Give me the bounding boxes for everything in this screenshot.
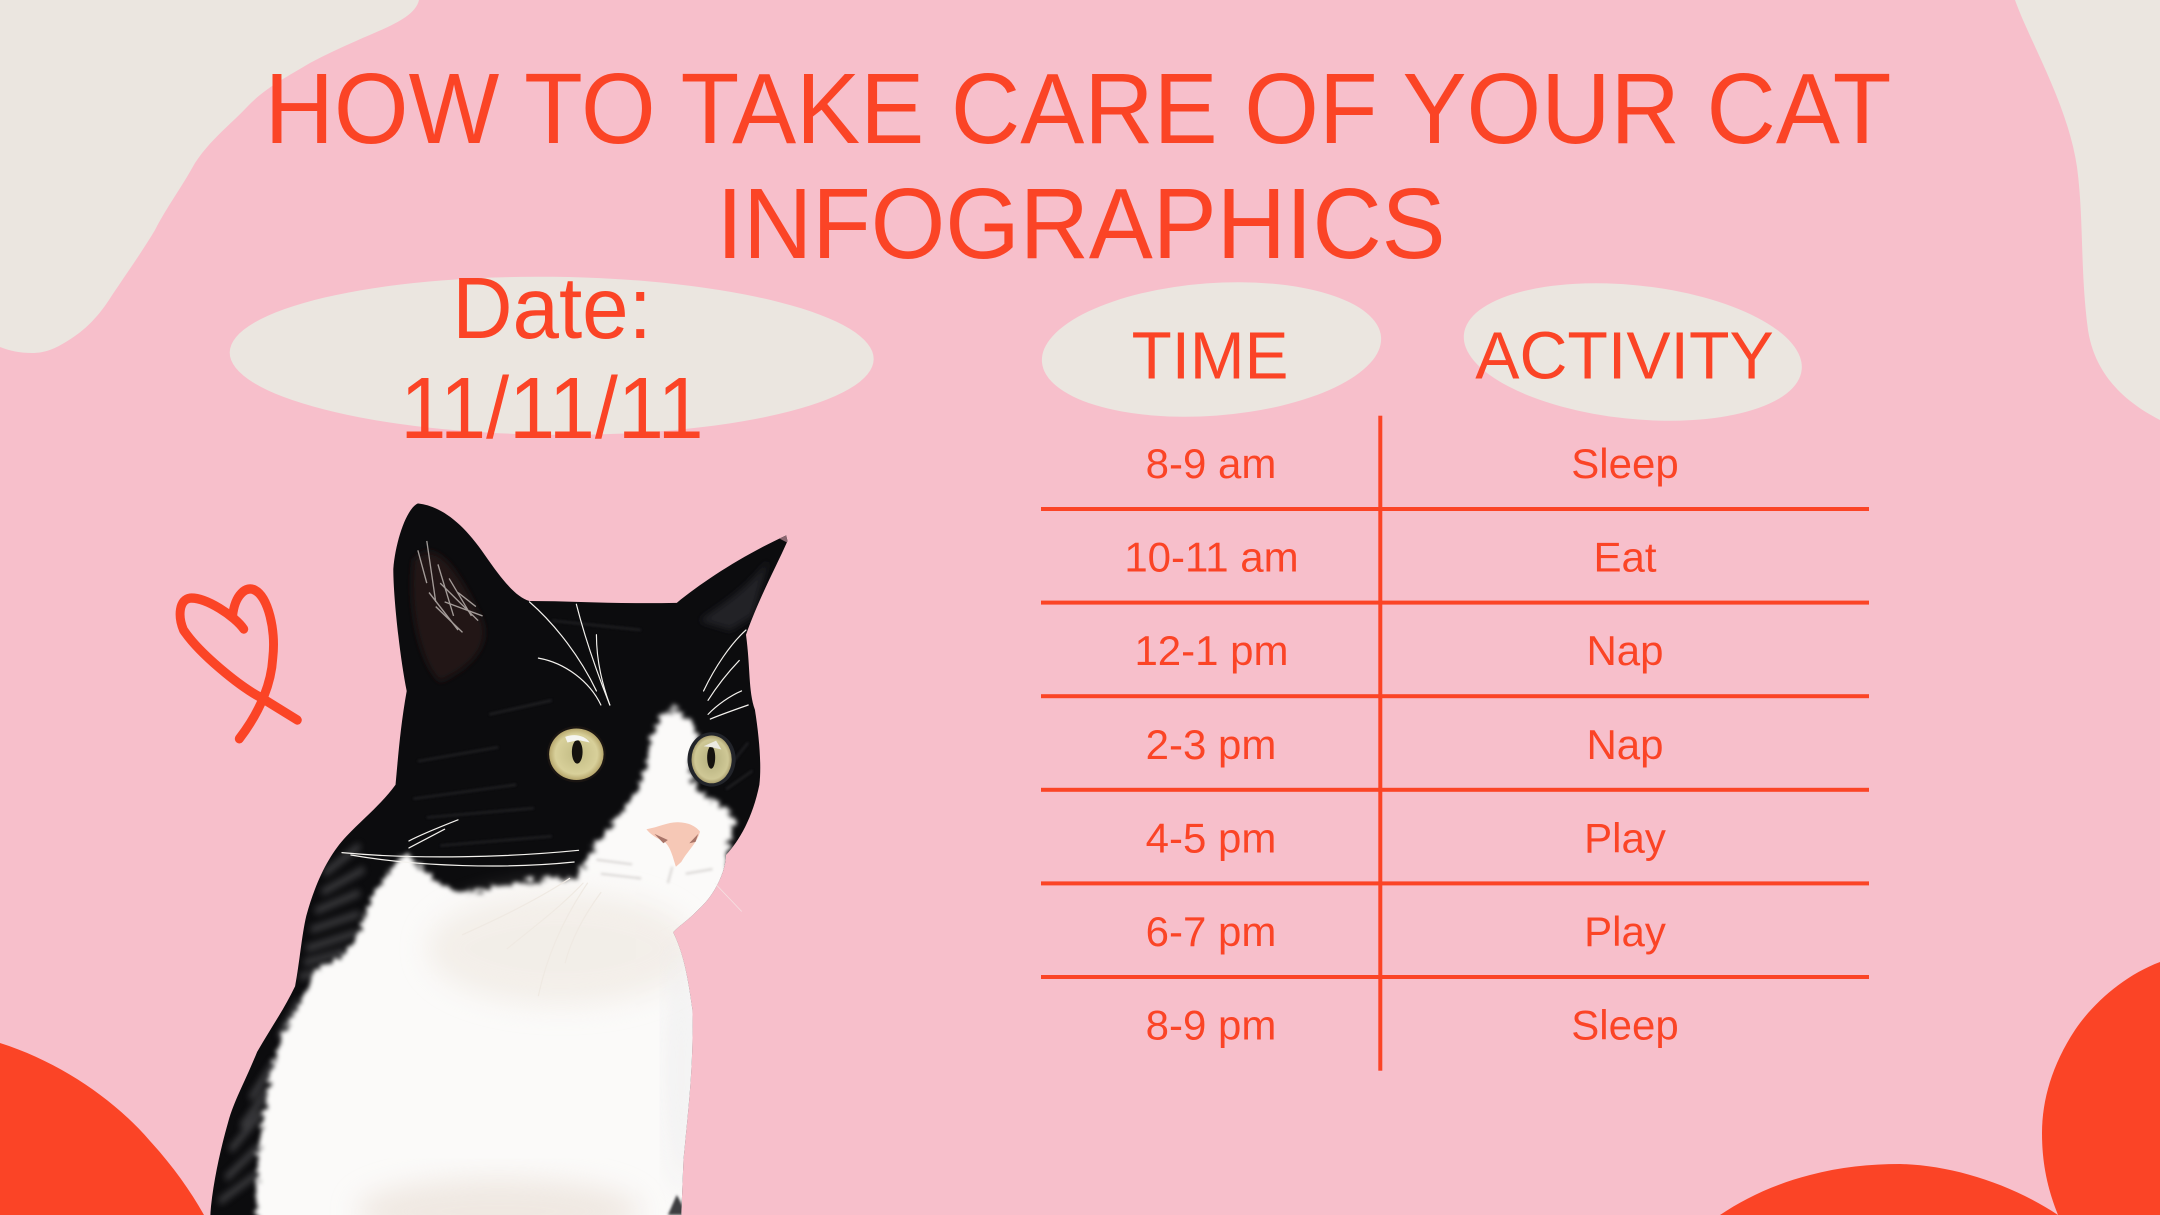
blob: top-left beige <box>0 0 419 353</box>
cat bottom-right dark patch <box>666 1194 682 1215</box>
row 1 <box>1146 440 1679 487</box>
time header ellipse <box>1037 271 1386 428</box>
row 2: 10-11 am <box>1124 534 1299 581</box>
row 5: Play <box>1584 814 1666 861</box>
ear hair wisps <box>418 541 483 632</box>
cat nose <box>646 822 700 867</box>
date ellipse <box>229 273 875 438</box>
activity header ellipse <box>1457 268 1809 436</box>
cat lower chest shading <box>355 1178 641 1215</box>
blob: top-right beige <box>2015 0 2160 420</box>
cat left ear <box>412 541 484 682</box>
cat chest cream shading <box>427 892 695 1005</box>
cat photo illustration <box>210 504 788 1215</box>
activity heading: ACTIVITY <box>1475 319 1774 394</box>
blob: bottom-left red <box>0 1043 204 1215</box>
row 3 <box>1134 627 1664 674</box>
cat chest side shading <box>684 998 692 1157</box>
row 4: 2-3 pm <box>1146 721 1276 768</box>
row 2 <box>1124 534 1657 581</box>
row 7 <box>1146 1002 1679 1049</box>
cat white chest and muzzle <box>256 707 735 1215</box>
ear inner shading <box>412 552 484 682</box>
cat muzzle shading <box>596 860 713 883</box>
cat nostril right <box>689 834 698 843</box>
date badge <box>229 260 875 456</box>
row 4 <box>1146 721 1664 768</box>
cat whiskers <box>342 602 748 996</box>
date label: Date: <box>452 260 652 357</box>
cat nostrils <box>654 834 668 843</box>
cat fur sheen on head <box>413 621 753 846</box>
left eye <box>547 726 606 782</box>
blob: bottom-right red small <box>1720 1164 2058 1215</box>
row 2: Eat <box>1593 534 1657 581</box>
cat shoulder grey stripes <box>219 846 364 1202</box>
row 4: Nap <box>1586 721 1664 768</box>
icon: hand-drawn heart <box>180 589 297 739</box>
row 3: Nap <box>1586 627 1664 674</box>
row 3: 12-1 pm <box>1134 627 1289 674</box>
row 7: 8-9 pm <box>1146 1002 1276 1049</box>
row 5: 4-5 pm <box>1146 814 1276 861</box>
row 1: 8-9 am <box>1146 440 1276 487</box>
row 7: Sleep <box>1571 1002 1679 1049</box>
time heading: TIME <box>1132 319 1288 394</box>
title second line: INFOGRAPHICS <box>716 167 1446 279</box>
row 5 <box>1146 814 1666 861</box>
date value: 11/11/11 <box>400 359 704 456</box>
table grid lines <box>1041 416 1869 1071</box>
cat right ear sheen <box>702 566 767 631</box>
cat ear tip <box>780 536 788 542</box>
blob: bottom-right red large <box>2042 962 2160 1215</box>
schedule table <box>1037 268 1869 1071</box>
row 6: 6-7 pm <box>1146 908 1276 955</box>
right eye <box>688 732 736 787</box>
row 1: Sleep <box>1571 440 1679 487</box>
row 6 <box>1146 908 1666 955</box>
title: HOW TO TAKE CARE OF YOUR CAT <box>265 52 1891 164</box>
cat black fur <box>210 504 788 1215</box>
row 6: Play <box>1584 908 1666 955</box>
